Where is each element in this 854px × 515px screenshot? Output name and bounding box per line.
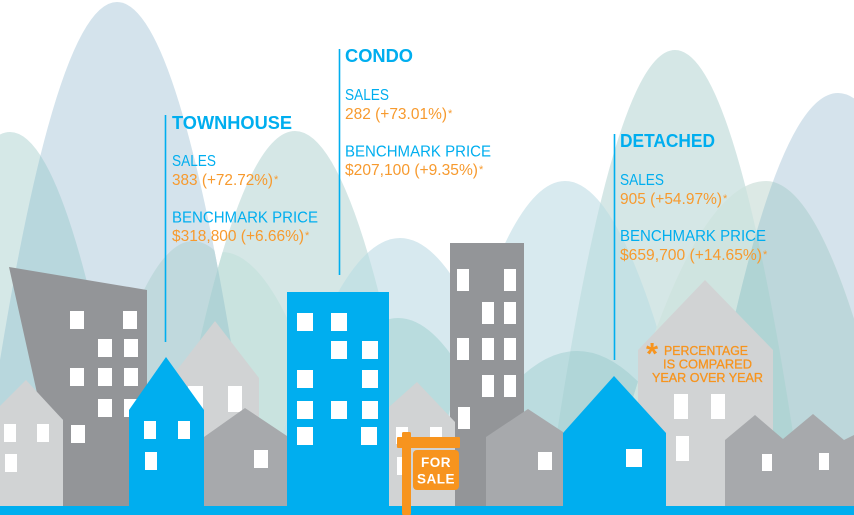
footnote: percentage comparison: YEAR OVER YEAR: [652, 370, 763, 385]
callout: detached: *: [763, 249, 768, 261]
callout: townhouse: *: [274, 174, 279, 186]
callout: detached: [614, 131, 768, 360]
callout: townhouse: BENCHMARK PRICE: [172, 210, 318, 226]
callout: detached: $659,700 (+14.65%): [620, 247, 762, 264]
building: blue townhouse: [129, 357, 204, 506]
building: centre light house: [389, 382, 455, 506]
callout: detached: SALES: [620, 172, 664, 189]
callout: condo: 282 (+73.01%): [345, 106, 447, 123]
callout: condo: CONDO: [345, 46, 413, 66]
building: large light house: [638, 280, 773, 506]
for sale sign: FOR: [421, 455, 451, 470]
building: grey house: [204, 408, 287, 506]
callout: detached: 905 (+54.97%): [620, 191, 722, 208]
callout: condo: BENCHMARK PRICE: [345, 144, 491, 160]
for sale sign: SALE: [417, 472, 455, 486]
callout: condo: $207,100 (+9.35%): [345, 162, 478, 179]
callout: townhouse: 383 (+72.72%): [172, 172, 273, 189]
callout: townhouse: *: [305, 230, 310, 242]
callout: detached: DETACHED: [620, 131, 715, 151]
callout: condo: *: [448, 108, 453, 120]
callout: condo: [339, 46, 491, 275]
building: angular grey office: [9, 267, 147, 506]
footnote: percentage comparison: [646, 336, 763, 385]
callout: townhouse: [165, 113, 318, 342]
callout: townhouse: $318,800 (+6.66%): [172, 228, 304, 245]
callout: condo: SALES: [345, 87, 389, 104]
footnote: percentage comparison: *: [646, 336, 659, 371]
footnote: percentage comparison: IS COMPARED: [663, 356, 752, 372]
building: blue condo tower: [287, 292, 389, 506]
building: left light house: [0, 380, 63, 506]
building: grey tower: [450, 243, 524, 506]
callout: townhouse: SALES: [172, 153, 216, 170]
building: light house behind townhouse: [177, 321, 259, 450]
ground strip: [0, 506, 854, 515]
callout: detached: BENCHMARK PRICE: [620, 228, 766, 245]
callout: condo: *: [479, 164, 484, 176]
footnote: percentage comparison: PERCENTAGE: [664, 343, 748, 358]
callout: detached: *: [723, 193, 728, 205]
building: grey house 2: [486, 409, 563, 506]
callout: townhouse: TOWNHOUSE: [172, 113, 292, 133]
for sale sign: [397, 432, 460, 515]
building: right grey houses: [725, 414, 854, 507]
building: blue detached house: [563, 376, 666, 506]
